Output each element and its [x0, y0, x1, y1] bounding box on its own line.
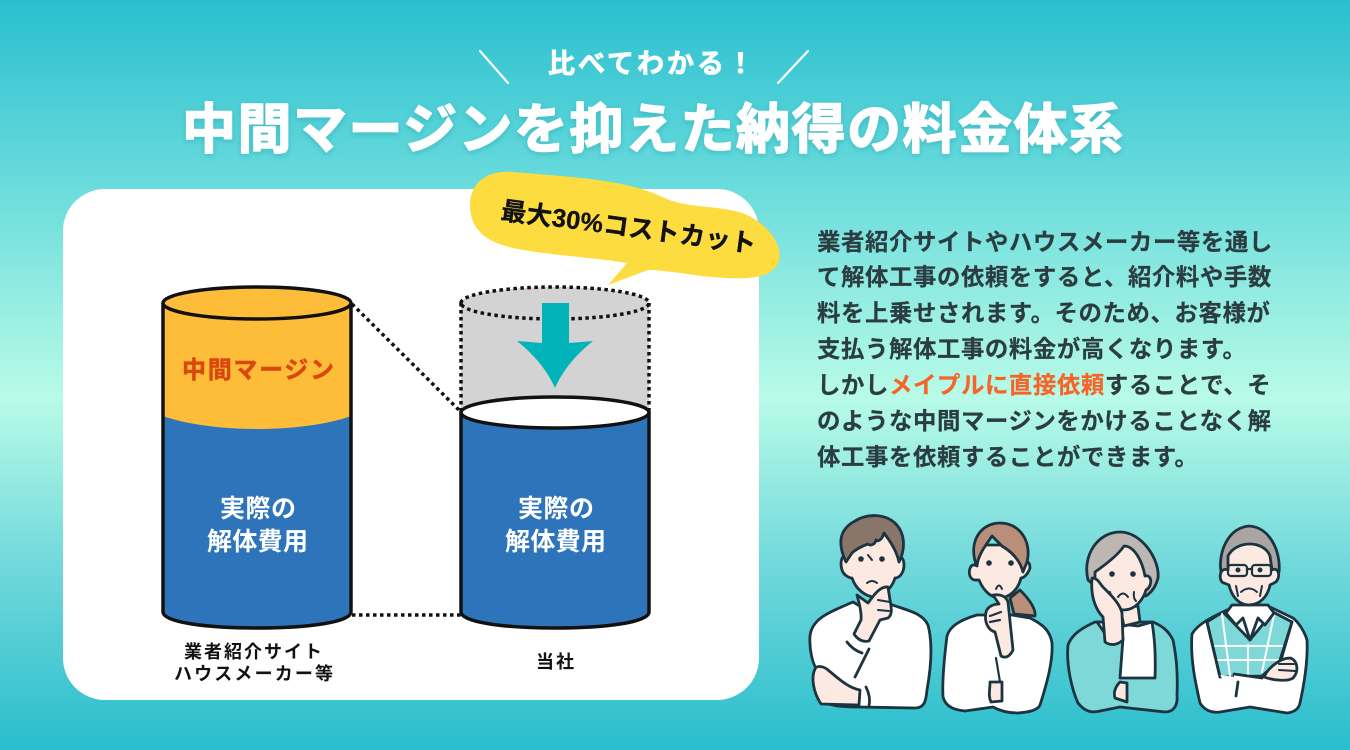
subtitle: 比べてわかる！ [548, 49, 754, 79]
person: older woman [1068, 532, 1177, 712]
arrow: down [517, 303, 593, 388]
explanation text: しかしメイプルに直接依頼することで、そ [817, 372, 1271, 398]
bubble text: 最大30%コストカット [499, 197, 758, 259]
explanation text: 業者紹介サイトやハウスメーカー等を通し [817, 229, 1273, 255]
person: young man [810, 516, 931, 708]
cylinder: intermediaries [163, 287, 351, 628]
label: actual cost: 解体費用 [207, 528, 308, 556]
subtitle [480, 49, 808, 83]
cylinder: our company [461, 287, 649, 628]
caption: intermediaries: ハウスメーカー等 [174, 663, 333, 684]
caption: intermediaries [174, 642, 333, 684]
explanation text: 体工事を依頼することができます。 [817, 443, 1199, 470]
label: actual cost: 解体費用 [505, 528, 606, 556]
label: margin: 中間マージン [182, 357, 334, 384]
title: 中間マージンを抑えた納得の料金体系 [182, 100, 1123, 160]
illustration: four worried people [810, 516, 1307, 713]
person: young woman [943, 523, 1052, 713]
label: actual cost: 実際の [220, 495, 296, 523]
label: actual cost [505, 495, 606, 556]
explanation text: 料を上乗せされます。そのため、お客様が [817, 299, 1270, 326]
caption: our company: 当社 [536, 652, 574, 672]
speech bubble [470, 172, 780, 285]
explanation text: 支払う解体工事の料金が高くなります。 [817, 335, 1246, 362]
person: older man [1192, 526, 1307, 713]
connector lines [352, 304, 461, 615]
label: actual cost: 実際の [518, 495, 594, 523]
caption: intermediaries: 業者紹介サイト [184, 642, 322, 662]
explanation text [817, 229, 1273, 470]
explanation text: て解体工事の依頼をすると、紹介料や手数 [817, 264, 1272, 290]
label: actual cost [207, 495, 308, 556]
panel: cost comparison [63, 189, 759, 700]
explanation text: のような中間マージンをかけることなく解 [817, 408, 1272, 434]
